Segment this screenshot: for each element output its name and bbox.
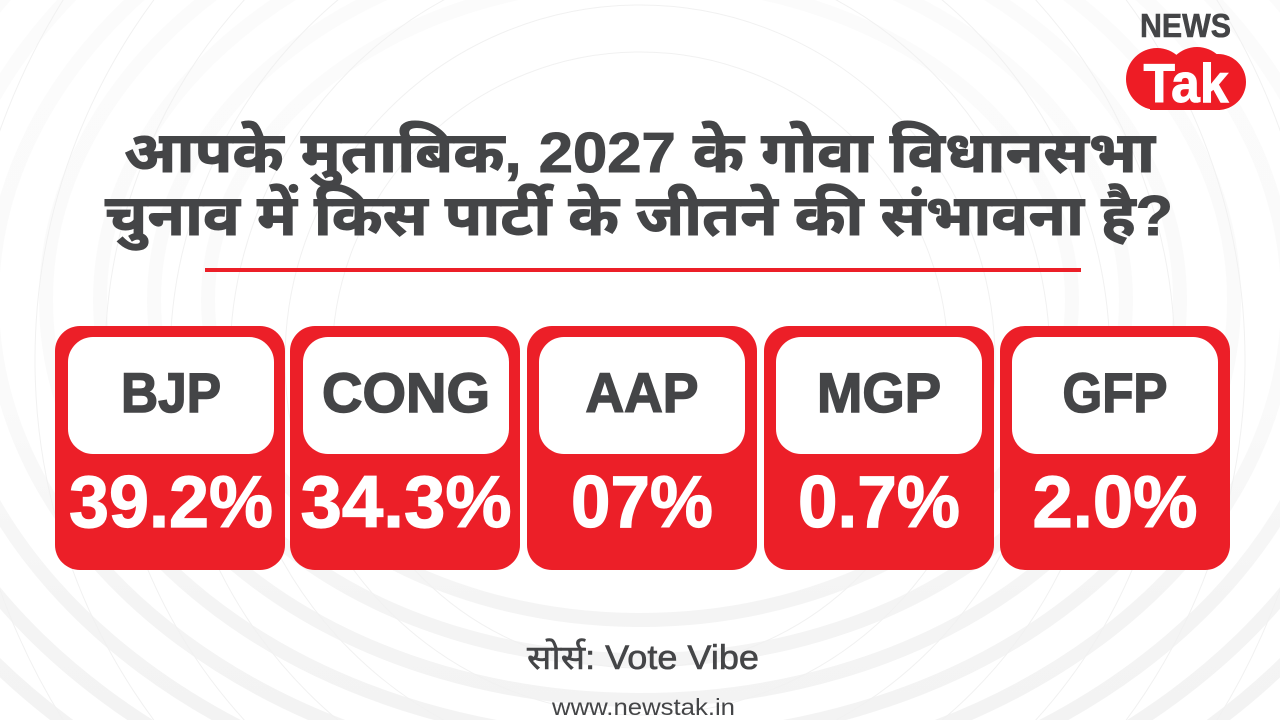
logo cloud	[1126, 47, 1246, 110]
card: AAP: 07%	[571, 462, 713, 543]
card: GFP: 2.0%	[1032, 462, 1198, 543]
card: BJP: 39.2%	[69, 462, 273, 543]
card: MGP	[764, 326, 994, 570]
card: CONG: 34.3%	[300, 462, 512, 543]
title line 2: चुनाव में किस पार्टी के जीतने की संभावना है?	[105, 182, 1173, 251]
title line 1: आपके मुताबिक, 2027 के गोवा विधानसभा	[124, 120, 1156, 188]
card: GFP: GFP	[1062, 361, 1168, 424]
website: www.newstak.in	[551, 694, 735, 720]
source: सोर्स: Vote Vibe	[527, 638, 759, 677]
title	[105, 120, 1173, 251]
logo word: Tak: Tak	[1144, 52, 1229, 114]
card: CONG	[290, 326, 520, 570]
card: AAP: AAP	[586, 361, 698, 424]
card: AAP	[527, 326, 757, 570]
card: CONG: CONG	[322, 361, 490, 424]
card: BJP	[55, 326, 285, 570]
card: MGP: 0.7%	[798, 462, 960, 543]
logo: News Tak	[1126, 7, 1246, 114]
title underline	[205, 268, 1081, 272]
card: MGP: MGP	[817, 361, 941, 424]
card: GFP	[1000, 326, 1230, 570]
logo word: NEWS: NEWS	[1140, 7, 1231, 44]
card: BJP: BJP	[121, 361, 221, 424]
